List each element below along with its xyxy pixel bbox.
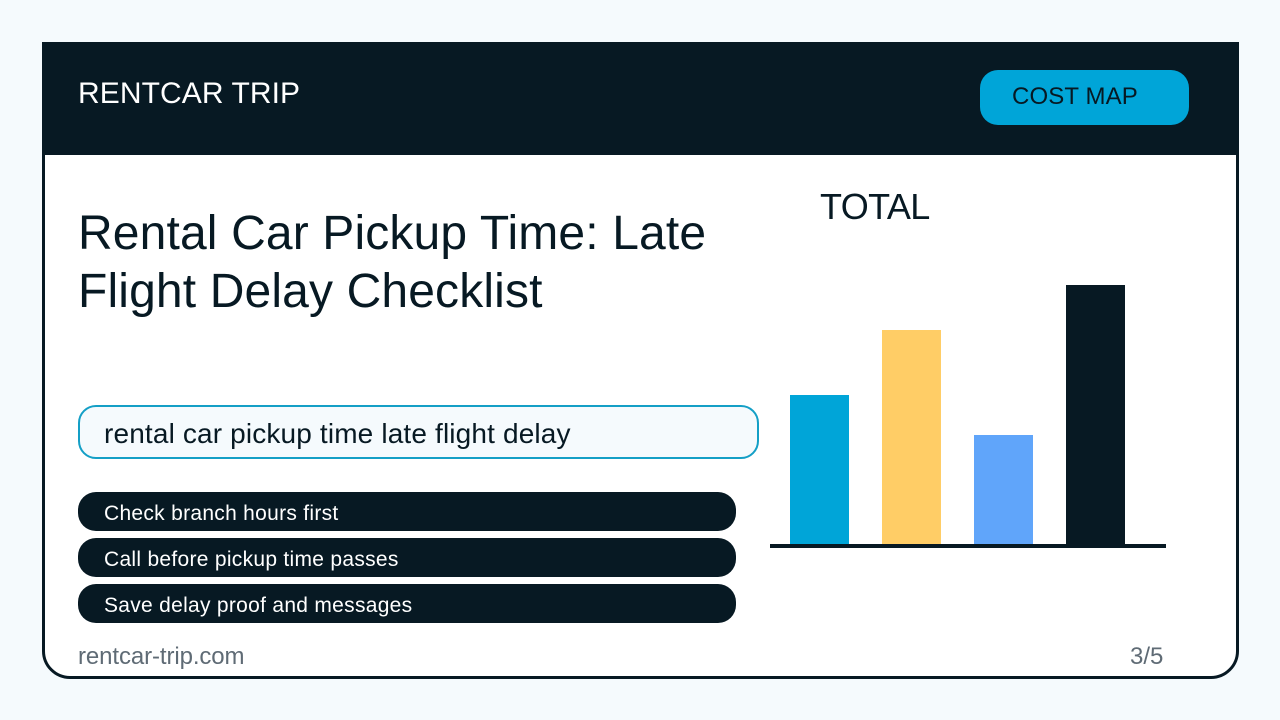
title: Flight Delay Checklist — [78, 265, 543, 318]
header band — [42, 42, 1239, 155]
title — [78, 207, 706, 318]
checklist item 1: Check branch hours first — [104, 502, 339, 525]
bar 2 — [882, 330, 941, 545]
page number: 3/5 — [1130, 643, 1163, 670]
bar chart — [770, 285, 1166, 548]
checklist item 1 — [78, 492, 736, 531]
checklist item 2: Call before pickup time passes — [104, 548, 399, 571]
title: Rental Car Pickup Time: Late — [78, 207, 706, 260]
badge: cost map — [980, 70, 1189, 125]
footer website: rentcar-trip.com — [78, 643, 244, 670]
bar 1 — [790, 395, 849, 545]
bar 3 — [974, 435, 1033, 545]
brand name: RENTCAR TRIP — [78, 77, 300, 110]
baseline — [770, 544, 1166, 548]
chart heading: TOTAL — [820, 186, 930, 227]
keyword box: rental car pickup time late flight delay — [104, 418, 571, 449]
checklist item 3: Save delay proof and messages — [104, 594, 412, 617]
badge: cost map: COST MAP — [1012, 83, 1138, 110]
checklist item 2 — [78, 538, 736, 577]
checklist item 3 — [78, 584, 736, 623]
keyword box — [78, 405, 759, 459]
bar 4 — [1066, 285, 1125, 545]
